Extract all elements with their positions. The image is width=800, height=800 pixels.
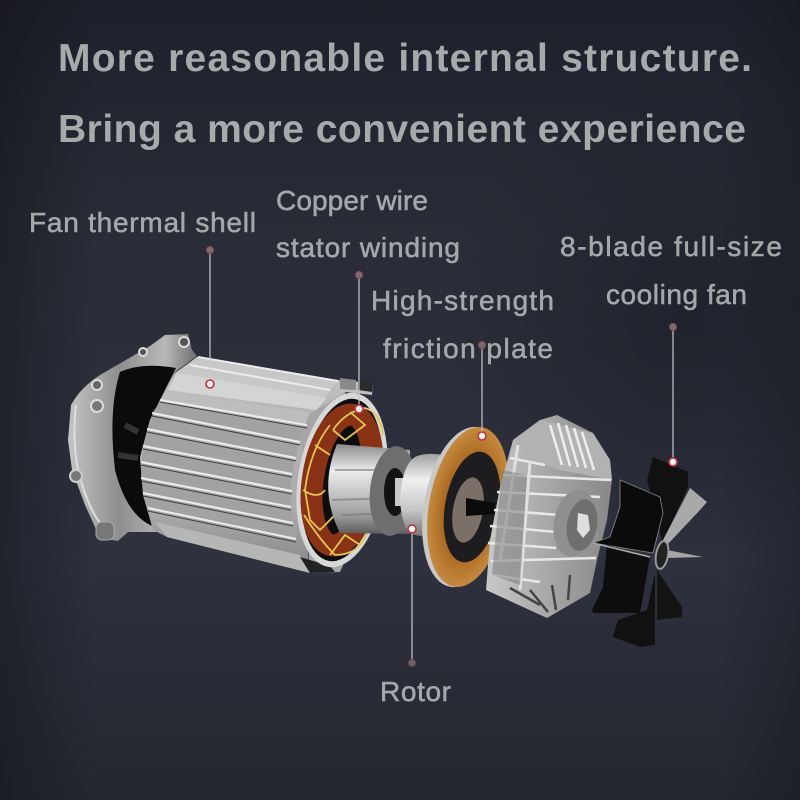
label: Rotor: Rotor <box>380 676 451 707</box>
leader: 8-blade full-size cooling fan <box>669 324 677 466</box>
label: High-strength friction plate <box>371 285 554 364</box>
leader: Fan thermal shell <box>206 246 214 388</box>
friction plate <box>411 420 520 594</box>
label: Copper wire stator winding: Copper wire <box>276 185 428 216</box>
title: Bring a more convenient experience <box>58 108 746 151</box>
leader: High-strength friction plate <box>478 342 486 440</box>
label: Fan thermal shell: Fan thermal shell <box>29 207 256 238</box>
rear end cover <box>486 415 612 618</box>
motor illustration <box>68 334 707 647</box>
rotor <box>328 444 444 540</box>
copper stator winding <box>285 386 399 574</box>
cooling fan, eight blades <box>592 457 707 647</box>
leader: Copper wire stator winding <box>355 272 363 413</box>
title: More reasonable internal structure. <box>58 37 752 80</box>
motor end cover, left <box>68 334 197 541</box>
label: 8-blade full-size cooling fan: cooling fan <box>606 279 747 310</box>
label: High-strength friction plate: High-strength <box>371 285 554 316</box>
label: 8-blade full-size cooling fan <box>560 231 782 310</box>
label: High-strength friction plate: friction plate <box>383 333 553 364</box>
label: 8-blade full-size cooling fan: 8-blade full-size <box>560 231 782 262</box>
leader: Rotor <box>408 525 416 666</box>
label: Copper wire stator winding: stator winding <box>276 232 460 263</box>
title <box>58 37 752 151</box>
label: Copper wire stator winding <box>276 185 460 263</box>
finned motor housing <box>140 357 385 573</box>
